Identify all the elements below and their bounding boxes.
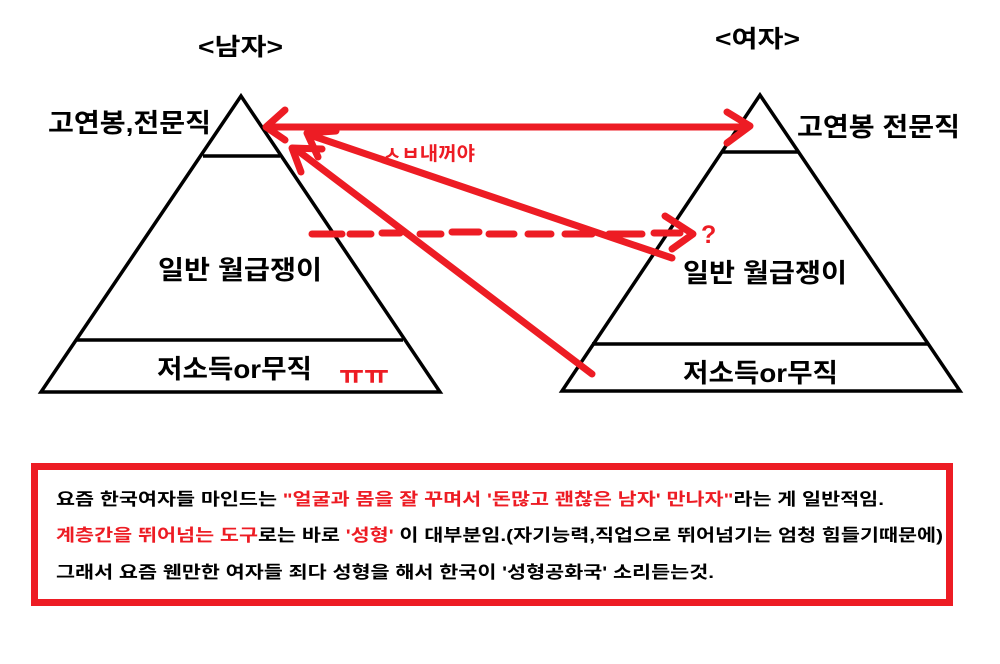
annotation: mine: ㅅㅂ내꺼야 (383, 143, 475, 165)
label: women low income: 저소득or무직 (683, 358, 838, 388)
label: women high income: 고연봉 전문직 (797, 112, 960, 142)
label: men high income: 고연봉,전문직 (48, 108, 211, 138)
text line 3: 그래서 요즘 웬만한 여자들 죄다 성형을 해서 한국이 '성형공화국' 소리듣는것. (56, 563, 714, 582)
heading: men: <남자> (198, 34, 283, 61)
label: women salaried: 일반 월급쟁이 (683, 258, 847, 288)
arrow: dashed men salaried to women (312, 216, 693, 249)
label: men low income: 저소득or무직 (157, 354, 312, 384)
arrow: top tier both ways (266, 110, 750, 143)
panel: explanation box (34, 466, 950, 602)
text line 2: 계층간을 뛰어넘는 도구 로는 바로 '성형' 이 대부분임.(자기능력,직업으로 뛰어넘기는 엄청 힘들기때문에) (56, 526, 943, 545)
annotation: question mark: ? (701, 221, 716, 249)
label: crying emoticon: ㅠㅠ (339, 360, 389, 390)
pyramid: women (562, 95, 960, 391)
arrow: low income women to top men (292, 148, 592, 374)
pyramid: men (41, 96, 440, 392)
arrow: salaried women to top men (307, 131, 672, 258)
heading: women: <여자> (715, 26, 800, 53)
text line 1: 요즘 한국여자들 마인드는 "얼굴과 몸을 잘 꾸며서 '돈많고 괜찮은 남자' 만나자" 라는 게 일반적임. (56, 489, 884, 509)
label: men salaried: 일반 월급쟁이 (158, 255, 322, 285)
